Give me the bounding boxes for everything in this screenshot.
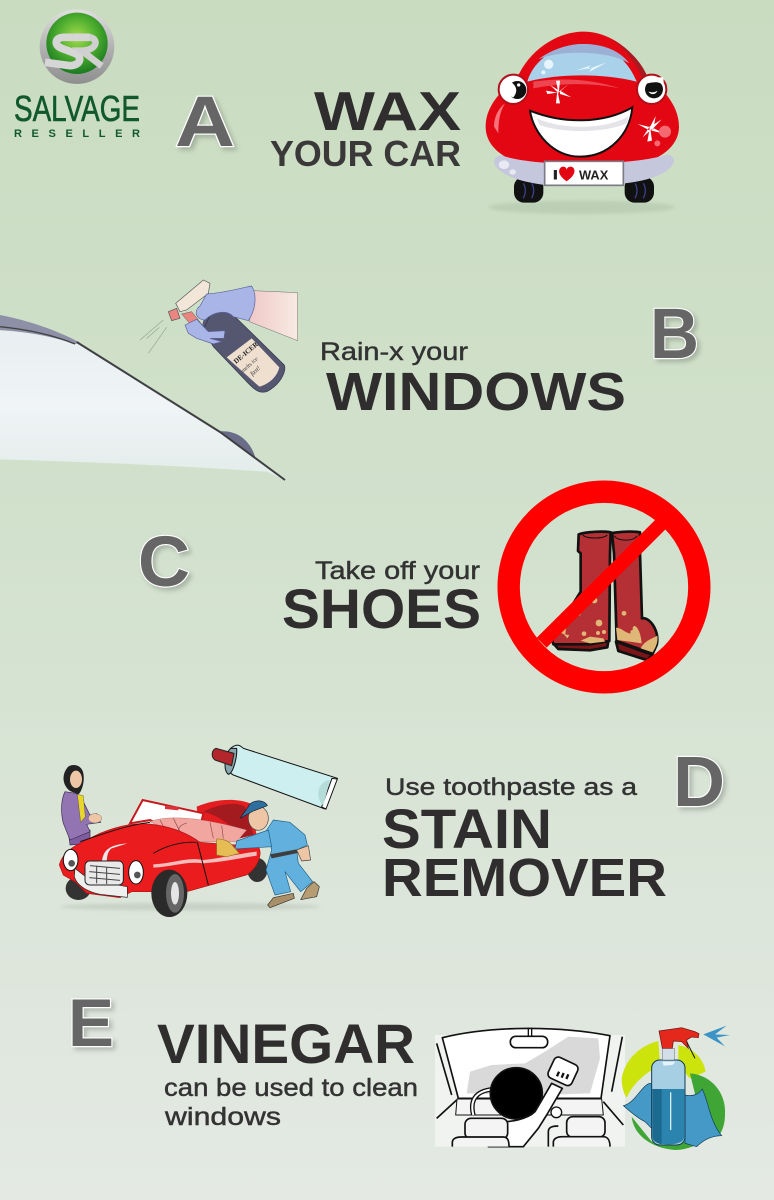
mechanic	[217, 801, 319, 908]
body line one: can be used to clean	[164, 1074, 418, 1102]
heading line: REMOVER: REMOVER	[382, 848, 667, 908]
heading line: STAIN: STAIN	[382, 797, 552, 860]
logo emblem	[40, 9, 114, 84]
letter C: C	[138, 523, 190, 602]
heading: use toothpaste as a stain remover	[382, 774, 667, 908]
heading: take off your shoes	[282, 557, 481, 640]
letter E: E	[68, 985, 114, 1061]
bottle label text: DE-ICER	[232, 340, 261, 366]
illustration: toothpaste tube	[212, 745, 337, 809]
logo wordmark: SALVAGE	[14, 88, 140, 129]
letter A: A	[175, 83, 235, 162]
body line two: windows	[164, 1103, 281, 1131]
letter B: B	[650, 295, 699, 374]
subheading line: Use toothpaste as a	[385, 774, 638, 801]
illustration: smiling red car	[486, 32, 679, 214]
logo tagline: RESELLER	[14, 128, 140, 140]
bottle label small word: fast!	[249, 365, 262, 377]
illustration: windshield	[0, 315, 285, 480]
subheading line: Take off your	[315, 557, 480, 585]
heading: wax your car	[270, 80, 461, 174]
illustration: person wiping inside of windshield	[435, 1028, 625, 1147]
illustration: boots with prohibition sign	[509, 492, 699, 682]
left boot	[553, 532, 611, 650]
logo: Salvage Reseller	[14, 9, 140, 140]
illustration: spray bottle with cloth	[622, 1026, 730, 1150]
heading line: SHOES: SHOES	[282, 577, 481, 640]
illustration: woman and man polishing a red convertible	[59, 765, 320, 917]
letter D: D	[673, 743, 725, 822]
bottle label small text: melts ice	[241, 356, 260, 374]
subheading line: Rain-x your	[320, 338, 468, 366]
heading: vinegar can be used to clean windows	[157, 1012, 418, 1131]
heading line: YOUR CAR: YOUR CAR	[270, 133, 461, 174]
heading line: WAX: WAX	[314, 80, 461, 142]
license plate word: WAX	[579, 167, 608, 182]
heading: rain-x your windows	[320, 338, 626, 422]
right boot	[612, 532, 657, 660]
illustration: gloved hand with de-icer spray bottle	[140, 280, 298, 392]
heading line: VINEGAR: VINEGAR	[157, 1012, 415, 1075]
license plate text: I	[552, 166, 558, 182]
heading line: WINDOWS: WINDOWS	[326, 362, 626, 422]
